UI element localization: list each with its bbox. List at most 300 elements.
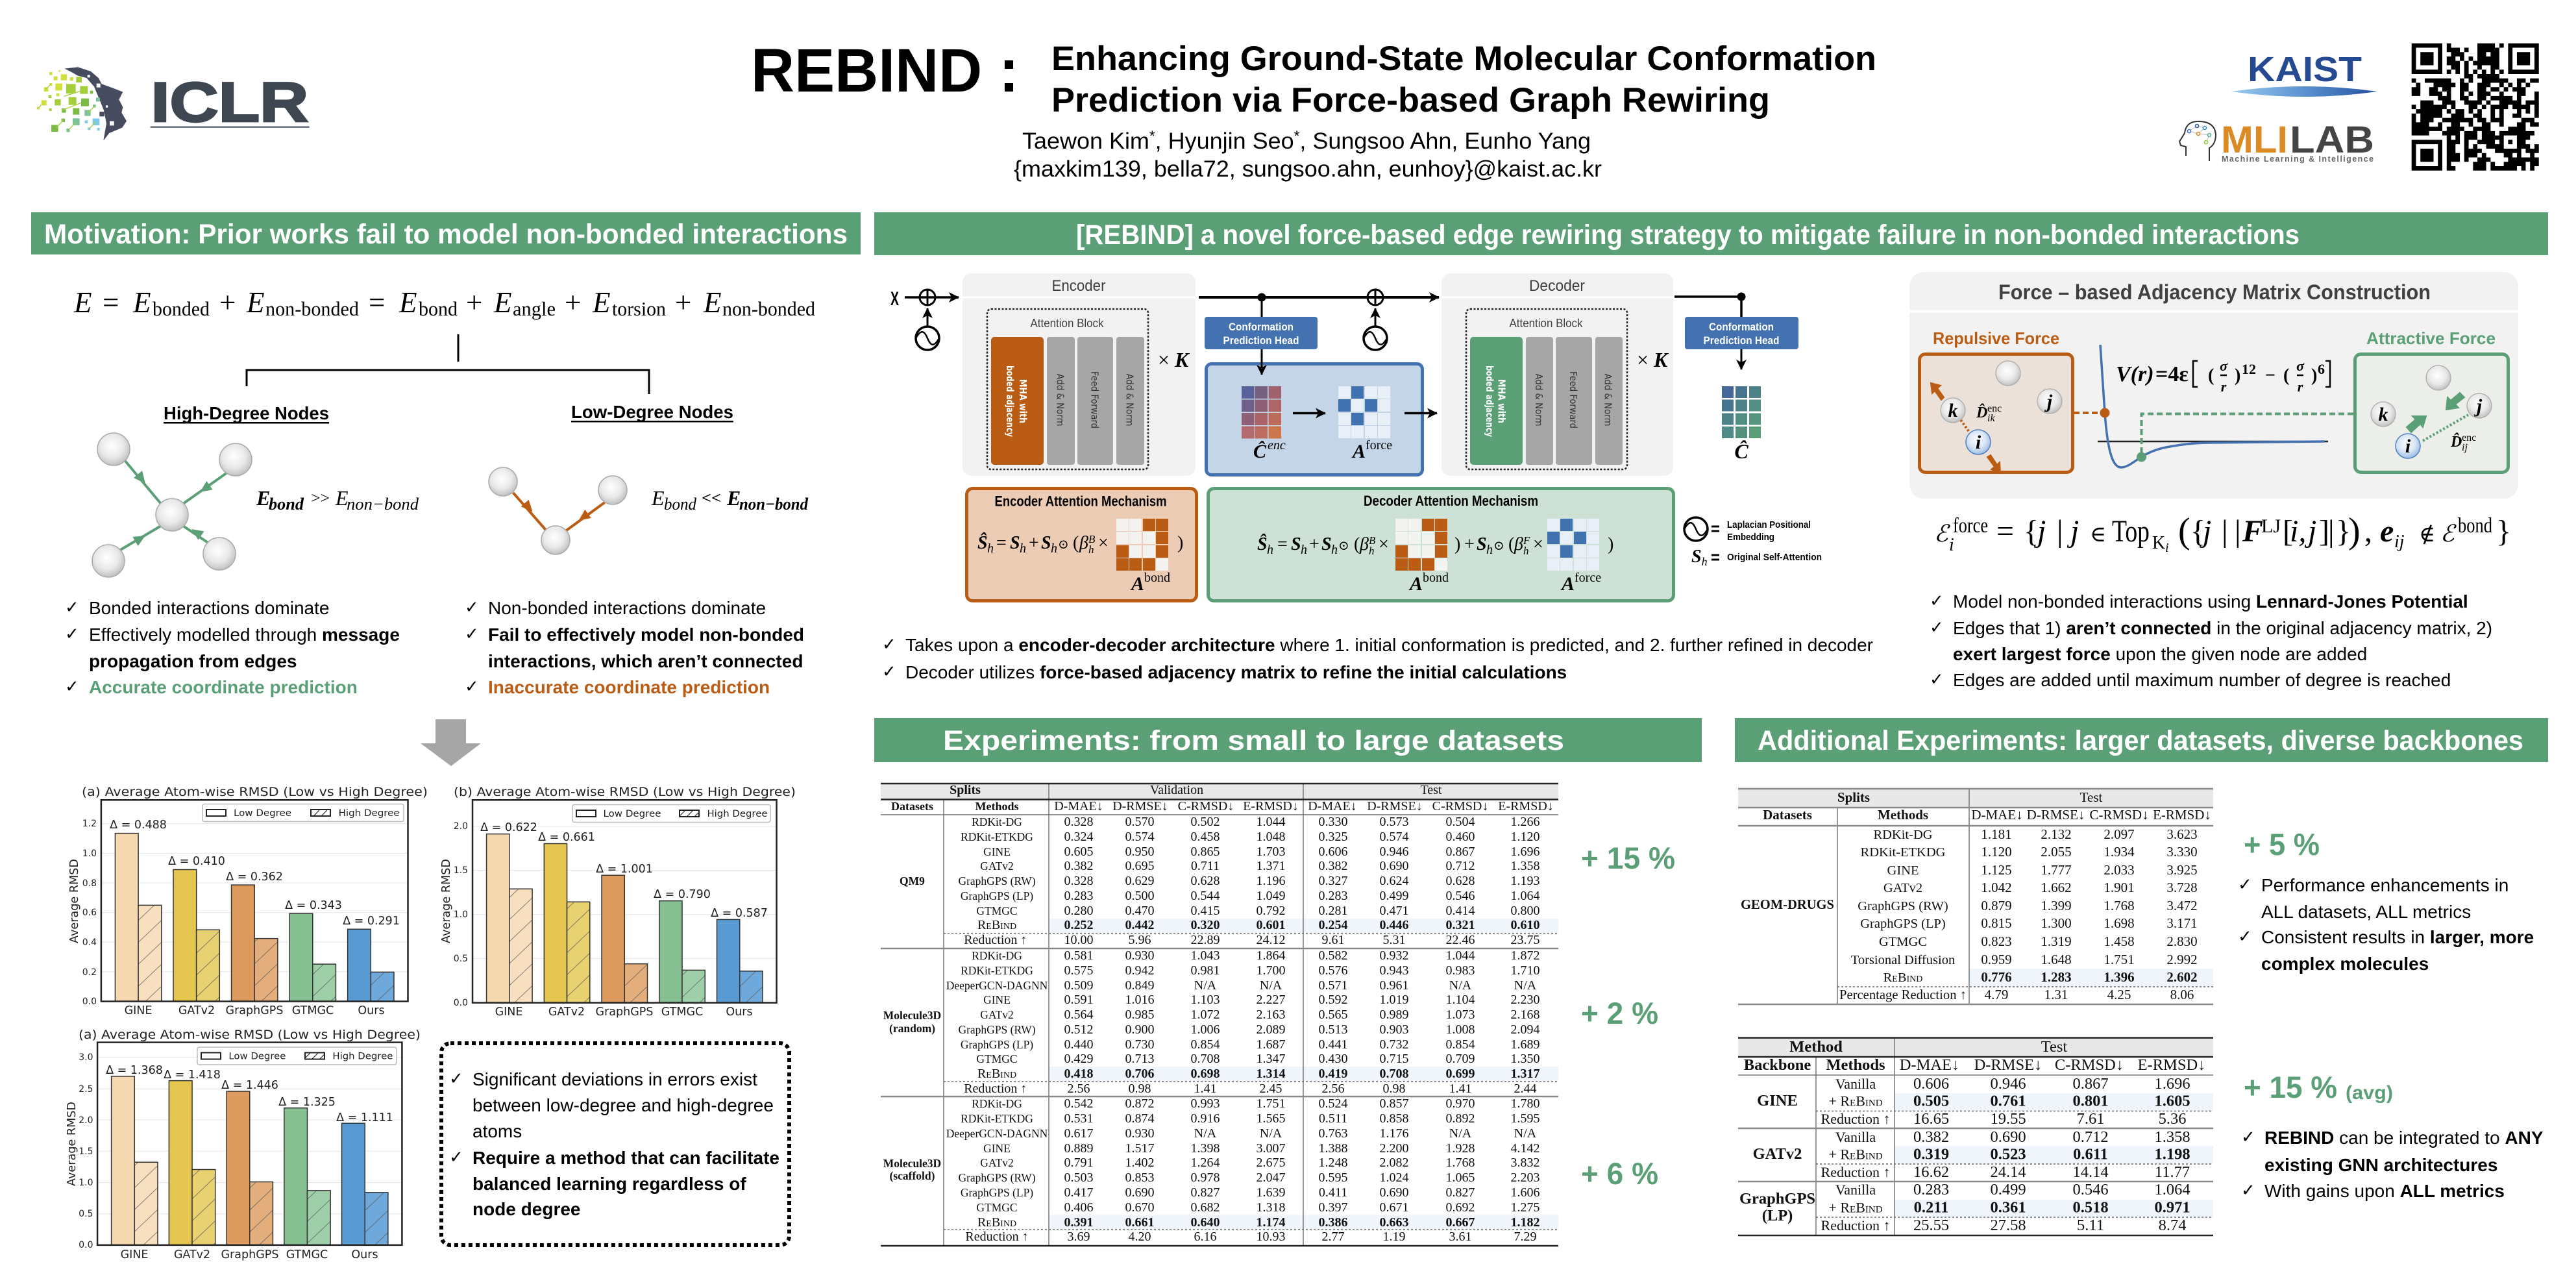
equation: decoder attention: S bbox=[1291, 534, 1301, 554]
bullets: force construction bbox=[1930, 591, 2492, 690]
numeric data Molecule3D scaffold: N/A bbox=[1514, 1126, 1537, 1141]
equation: Lennard-Jones: =4ε bbox=[2155, 362, 2189, 386]
numeric data Molecule3D random: 1.687 bbox=[1257, 1037, 1285, 1052]
numeric data QM9: 0.629 bbox=[1125, 874, 1154, 888]
numeric data QM9: 0.382 bbox=[1064, 859, 1093, 873]
equation: encoder attention: = bbox=[996, 533, 1007, 553]
table: backbones: 0.546 bbox=[2072, 1181, 2109, 1198]
numeric data QM9: 0.415 bbox=[1190, 904, 1220, 918]
numeric data Molecule3D scaffold: 2.77 bbox=[1321, 1230, 1345, 1244]
numeric data Molecule3D random: 0.713 bbox=[1125, 1052, 1154, 1066]
table: backbones: D-MAE↓ bbox=[1900, 1056, 1959, 1074]
equation: force edge set: ℰ bbox=[2440, 521, 2457, 547]
method names: GATv2 bbox=[980, 1156, 1014, 1169]
table: GEOM-DRUGS: GINE bbox=[1887, 863, 1919, 878]
equation: force edge set: ] bbox=[2319, 514, 2329, 549]
equation: encoder attention: h bbox=[1088, 543, 1094, 556]
heading: REBIND: [REBIND] a novel force-based edge rewiring strategy to mitigate failure in non-bonded interactions bbox=[1076, 219, 2300, 251]
stat: +15 percent: + 15 % bbox=[1581, 841, 1675, 875]
numeric data Molecule3D scaffold: 0.874 bbox=[1125, 1111, 1154, 1126]
panel: decoder attention mechanism: A bbox=[1408, 573, 1423, 595]
table: GEOM-DRUGS: 2.132 bbox=[2041, 826, 2072, 842]
numeric data QM9: 0.610 bbox=[1511, 918, 1539, 932]
panel: encoder bbox=[963, 273, 1196, 476]
table header: D-MAE↓ bbox=[1308, 799, 1357, 813]
method names: RDKit-DG bbox=[972, 1097, 1022, 1110]
table: backbones: GATv2 bbox=[1753, 1145, 1802, 1163]
numeric data Molecule3D random: N/A bbox=[1260, 978, 1282, 993]
equation: decoder attention: h bbox=[1301, 543, 1307, 557]
numeric data Molecule3D scaffold: 0.417 bbox=[1064, 1185, 1093, 1200]
numeric data Molecule3D random: 0.706 bbox=[1125, 1067, 1154, 1081]
table: GEOM-DRUGS: D-MAE↓ bbox=[1971, 807, 2023, 823]
numeric data QM9: 0.544 bbox=[1190, 889, 1220, 903]
numeric data QM9: 0.546 bbox=[1446, 889, 1475, 903]
logo: MLILAB: MLI bbox=[2221, 119, 2288, 161]
bullets: low-degree: Fail to effectively model non-bonded bbox=[488, 625, 804, 645]
bullets: force construction: Edges that 1) aren’t connected in the original adjacency matrix, 2) bbox=[1953, 618, 2492, 638]
equation: decoder attention: S bbox=[1477, 534, 1487, 554]
numeric data QM9: 0.328 bbox=[1064, 815, 1093, 829]
stat: +15 percent avg: (avg) bbox=[2346, 1082, 2393, 1104]
equation: encoder attention: Ŝ bbox=[977, 533, 988, 553]
numeric data QM9: 0.328 bbox=[1064, 874, 1093, 888]
numeric data Molecule3D random bbox=[1064, 948, 1539, 1096]
table: GEOM-DRUGS: 1.125 bbox=[1981, 862, 2012, 878]
numeric data QM9: 1.371 bbox=[1257, 859, 1285, 873]
equation: encoder attention: × bbox=[1098, 533, 1109, 553]
chart: RMSD c: Δ = 1.446 bbox=[221, 1079, 278, 1092]
numeric data QM9: 0.792 bbox=[1257, 904, 1285, 918]
bullets: GEOM-DRUGS: ✓ bbox=[2238, 875, 2252, 895]
table: backbones: 5.36 bbox=[2159, 1110, 2186, 1128]
legend: symbols: Original Self-Attention bbox=[1727, 552, 1822, 563]
bullets: high-degree: ✓ bbox=[65, 598, 79, 617]
method names: RDKit-ETKDG bbox=[961, 830, 1033, 843]
numeric data QM9: 0.324 bbox=[1064, 830, 1093, 844]
equation: encoder attention: h bbox=[1020, 541, 1026, 556]
table: backbones: Reduction ↑ bbox=[1821, 1164, 1890, 1180]
chart: RMSD a: Δ = 0.362 bbox=[226, 871, 283, 884]
numeric data Molecule3D scaffold: 1.639 bbox=[1257, 1185, 1285, 1200]
method names: Reduction ↑ bbox=[965, 1230, 1029, 1244]
panel: decoder: Attention Block bbox=[1510, 317, 1583, 330]
logo: KAIST: KAIST bbox=[2248, 50, 2362, 89]
numeric data Molecule3D random: 2.227 bbox=[1257, 993, 1285, 1007]
table: GEOM-DRUGS: 1.751 bbox=[2104, 952, 2135, 967]
equation: energy decomposition: non-bonded bbox=[265, 297, 359, 320]
equation: force edge set: ij bbox=[2394, 532, 2405, 552]
equation: force edge set: e bbox=[2380, 514, 2394, 549]
table: GEOM-DRUGS: 1.181 bbox=[1981, 826, 2012, 842]
numeric data Molecule3D random: 2.089 bbox=[1257, 1022, 1285, 1037]
output head and final coordinates: Ĉ bbox=[1734, 440, 1748, 463]
numeric data QM9: 0.321 bbox=[1446, 918, 1475, 932]
block: MHA decoder: boded adjacency bbox=[1484, 365, 1495, 437]
equation: Lennard-Jones: − bbox=[2265, 365, 2275, 386]
table: GEOM-DRUGS: 1.396 bbox=[2104, 969, 2135, 985]
numeric data Molecule3D scaffold: 0.670 bbox=[1125, 1200, 1154, 1215]
equation: force edge set: } bbox=[2496, 514, 2511, 549]
equation: force edge set: } bbox=[2336, 514, 2351, 549]
bullets: architecture: ✓ bbox=[882, 635, 896, 654]
equation: decoder attention: h bbox=[1486, 543, 1493, 557]
table: backbones: + ReBind bbox=[1828, 1093, 1883, 1109]
equation: force edge set: i bbox=[2165, 541, 2169, 555]
equation: decoder attention: = bbox=[1277, 534, 1288, 554]
matrix: final coordinates bbox=[1722, 386, 1761, 438]
table: backbones: Vanilla bbox=[1835, 1129, 1876, 1145]
chart: RMSD a: Δ = 0.343 bbox=[285, 899, 342, 912]
equation: force edge set: Top bbox=[2112, 514, 2150, 549]
numeric data Molecule3D random: 0.903 bbox=[1380, 1022, 1408, 1037]
repulsive force box: Repulsive Force bbox=[1933, 328, 2059, 348]
numeric data Molecule3D random: 0.565 bbox=[1319, 1008, 1347, 1022]
equation: force edge set: ) bbox=[2348, 511, 2361, 551]
numeric data Molecule3D scaffold: 7.29 bbox=[1514, 1230, 1537, 1244]
equation: decoder attention: ) bbox=[1454, 534, 1460, 554]
chart: RMSD b: GATv2 bbox=[548, 1006, 585, 1019]
numeric data Molecule3D scaffold: 1.565 bbox=[1257, 1111, 1285, 1126]
numeric data Molecule3D random: 2.168 bbox=[1511, 1008, 1539, 1022]
method names: GraphGPS (RW) bbox=[958, 1171, 1036, 1184]
chart: RMSD c: GATv2 bbox=[174, 1248, 210, 1261]
bullets: GEOM-DRUGS: ✓ bbox=[2238, 927, 2252, 947]
chart: RMSD b: Δ = 1.001 bbox=[596, 863, 653, 876]
numeric data Molecule3D scaffold: N/A bbox=[1260, 1126, 1282, 1141]
method names: ReBind bbox=[977, 1067, 1016, 1081]
numeric data QM9: 0.601 bbox=[1257, 918, 1285, 932]
table: GEOM-DRUGS: 1.399 bbox=[2041, 898, 2072, 913]
chart: RMSD a bbox=[68, 785, 428, 1017]
chart: RMSD a: Δ = 0.410 bbox=[168, 855, 225, 868]
bullets: low-degree: ✓ bbox=[465, 598, 479, 617]
numeric data QM9: 0.281 bbox=[1319, 904, 1347, 918]
bullets: low-degree: ✓ bbox=[465, 625, 479, 644]
chart: RMSD a: 0.2 bbox=[82, 967, 97, 978]
dataset labels: Molecule3D bbox=[883, 1009, 941, 1022]
table: GEOM-DRUGS: 1.648 bbox=[2041, 952, 2072, 967]
equation: decoder attention: ) bbox=[1608, 534, 1613, 554]
numeric data Molecule3D random: 1.006 bbox=[1190, 1022, 1220, 1037]
bullets: high-degree: ✓ bbox=[65, 625, 79, 644]
numeric data Molecule3D scaffold: 1.024 bbox=[1380, 1170, 1408, 1185]
method names: GraphGPS (RW) bbox=[958, 1023, 1036, 1036]
table: GEOM-DRUGS: 0.823 bbox=[1981, 934, 2012, 949]
table: backbones: + ReBind bbox=[1828, 1200, 1883, 1215]
numeric data Molecule3D scaffold: 0.386 bbox=[1319, 1215, 1347, 1230]
panel: experiments small to large bbox=[874, 718, 1702, 1246]
panel: REBIND architecture bbox=[874, 212, 2548, 690]
numeric data Molecule3D scaffold: 0.763 bbox=[1319, 1126, 1347, 1141]
numeric data Molecule3D random: 0.98 bbox=[1128, 1082, 1151, 1096]
method names: GINE bbox=[983, 845, 1011, 858]
input X with positional embedding bbox=[890, 288, 959, 350]
arrow: down to charts bbox=[421, 719, 481, 766]
numeric data Molecule3D scaffold: 0.889 bbox=[1064, 1141, 1093, 1156]
numeric data Molecule3D random: 0.581 bbox=[1064, 948, 1093, 963]
equation: Lennard-Jones: σ bbox=[2220, 358, 2228, 374]
equation: bond dominates: >> bbox=[311, 490, 330, 507]
numeric data Molecule3D scaffold: 0.661 bbox=[1125, 1215, 1154, 1230]
table: GEOM-DRUGS: 1.662 bbox=[2041, 880, 2072, 895]
numeric data Molecule3D scaffold: 1.402 bbox=[1125, 1156, 1154, 1170]
chart: Lennard-Jones potential curve bbox=[2074, 345, 2353, 467]
numeric data Molecule3D scaffold: 0.595 bbox=[1319, 1170, 1347, 1185]
panel: encoder attention mechanism bbox=[967, 488, 1197, 601]
table: backbones: Backbone bbox=[1744, 1056, 1811, 1074]
chart: RMSD c: 3.0 bbox=[79, 1052, 93, 1063]
numeric data Molecule3D scaffold: 0.617 bbox=[1064, 1126, 1093, 1141]
table header: D-MAE↓ bbox=[1054, 799, 1103, 813]
numeric data Molecule3D random: 0.943 bbox=[1380, 963, 1408, 978]
table: GEOM-DRUGS: 0.879 bbox=[1981, 898, 2012, 913]
diagram: low-degree molecule bbox=[489, 467, 627, 554]
QR code bbox=[2412, 43, 2539, 171]
bullets: force construction: Model non-bonded interactions using Lennard-Jones Potential bbox=[1953, 591, 2468, 612]
bullets: architecture: ✓ bbox=[882, 662, 896, 682]
numeric data QM9: 0.500 bbox=[1125, 889, 1154, 903]
equation: force edge set: , bbox=[2364, 514, 2372, 549]
equation: Lennard-Jones: r bbox=[2221, 378, 2227, 395]
numeric data Molecule3D random: 0.575 bbox=[1064, 963, 1093, 978]
equation: bond dominates: bond bbox=[269, 495, 304, 514]
numeric data Molecule3D scaffold: 0.542 bbox=[1064, 1096, 1093, 1111]
subtitle line 1: Enhancing Ground-State Molecular Conformation bbox=[1051, 40, 1876, 78]
numeric data Molecule3D scaffold: 2.082 bbox=[1380, 1156, 1408, 1170]
chart: RMSD c: High Degree bbox=[332, 1052, 393, 1062]
equation: encoder attention: ( bbox=[1073, 533, 1079, 553]
equation: decoder attention: h bbox=[1369, 545, 1375, 557]
table: backbones: 0.523 bbox=[1990, 1145, 2026, 1163]
numeric data Molecule3D random: 2.44 bbox=[1514, 1082, 1537, 1096]
equation: energy decomposition: E bbox=[246, 286, 265, 319]
callout: key takeaway: Significant deviations in errors exist bbox=[472, 1069, 757, 1089]
numeric data Molecule3D scaffold: 0.853 bbox=[1125, 1170, 1154, 1185]
chart: RMSD c: Δ = 1.325 bbox=[278, 1096, 336, 1109]
panel: decoder attention mechanism: bond bbox=[1423, 571, 1449, 585]
equation: encoder attention: + bbox=[1029, 533, 1039, 553]
equation: energy decomposition: + bbox=[565, 286, 581, 319]
authors: Taewon Kim bbox=[1022, 129, 1146, 154]
table: GEOM-DRUGS: 3.925 bbox=[2166, 862, 2198, 878]
table: backbones: 0.382 bbox=[1913, 1128, 1949, 1146]
equation: energy decomposition: E bbox=[399, 286, 417, 319]
method names: DeeperGCN-DAGNN bbox=[946, 1127, 1048, 1140]
callout: key takeaway: ✓ bbox=[449, 1069, 463, 1089]
numeric data QM9: 0.711 bbox=[1191, 859, 1220, 873]
numeric data QM9: 10.00 bbox=[1064, 933, 1093, 947]
numeric data QM9: 9.61 bbox=[1321, 933, 1345, 947]
panel: decoder attention mechanism: A bbox=[1560, 573, 1575, 595]
heading: low-degree nodes: Low-Degree Nodes bbox=[571, 402, 733, 422]
numeric data QM9: 0.458 bbox=[1190, 830, 1220, 844]
heading: experiments: Experiments: from small to large datasets bbox=[943, 725, 1564, 756]
block: MHA with bonded adjacency: MHA with bbox=[1017, 379, 1029, 423]
attractive force box bbox=[2355, 328, 2508, 473]
bullets: GEOM-DRUGS: ALL datasets, ALL metrics bbox=[2261, 902, 2471, 922]
emails: {maxkim139, bella72, sungsoo.ahn, eunhoy}@kaist.ac.kr bbox=[1014, 156, 1602, 182]
equation: force edge set: | bbox=[2235, 514, 2241, 549]
chart: RMSD b: Ours bbox=[726, 1006, 753, 1019]
numeric data Molecule3D random: 2.094 bbox=[1511, 1022, 1539, 1037]
chart: RMSD c: GraphGPS bbox=[221, 1248, 278, 1261]
numeric data Molecule3D random: 0.981 bbox=[1190, 963, 1220, 978]
table: backbones: 8.74 bbox=[2159, 1217, 2186, 1234]
chart: RMSD a: 0.0 bbox=[82, 997, 97, 1007]
chart: RMSD c: Δ = 1.111 bbox=[336, 1111, 393, 1124]
chart: RMSD a: (a) Average Atom-wise RMSD (Low vs High Degree) bbox=[82, 785, 428, 799]
table: backbones: 0.971 bbox=[2154, 1198, 2190, 1217]
heading: additional experiments bbox=[1735, 718, 2548, 762]
output head and final coordinates bbox=[1674, 292, 1798, 463]
table header: C-RMSD↓ bbox=[1432, 799, 1488, 813]
table: GEOM-DRUGS: Torsional Diffusion bbox=[1851, 953, 1955, 967]
equation: decoder attention: + bbox=[1309, 534, 1319, 554]
block: decoder add and norm / feed forward: Add & Norm bbox=[1602, 374, 1614, 426]
numeric data Molecule3D random: 0.989 bbox=[1380, 1008, 1408, 1022]
numeric data Molecule3D random: 1.008 bbox=[1446, 1022, 1475, 1037]
chart: RMSD b bbox=[440, 785, 796, 1019]
chart: RMSD a: 1.2 bbox=[82, 819, 97, 829]
equation: energy decomposition: = bbox=[369, 286, 385, 319]
numeric data Molecule3D scaffold: 1.517 bbox=[1125, 1141, 1154, 1156]
equation: Lennard-Jones: ) bbox=[2235, 365, 2240, 386]
bullets: low-degree: Inaccurate coordinate prediction bbox=[488, 677, 770, 697]
callout: key takeaway: atoms bbox=[472, 1121, 522, 1141]
numeric data QM9: 0.460 bbox=[1446, 830, 1475, 844]
numeric data Molecule3D scaffold: 4.20 bbox=[1128, 1230, 1151, 1244]
method names: GTMGC bbox=[976, 1052, 1018, 1065]
table: backbones: 25.55 bbox=[1913, 1217, 1949, 1234]
numeric data Molecule3D scaffold: 0.858 bbox=[1380, 1111, 1408, 1126]
numeric data Molecule3D scaffold: 1.388 bbox=[1319, 1141, 1347, 1156]
bullets: high-degree: propagation from edges bbox=[89, 651, 297, 671]
table: GEOM-DRUGS: 3.623 bbox=[2166, 826, 2198, 842]
equation: decoder attention: β bbox=[1514, 534, 1523, 554]
legend: symbols: S bbox=[1691, 547, 1702, 567]
table: backbones: 0.712 bbox=[2072, 1128, 2109, 1146]
numeric data Molecule3D random: 0.576 bbox=[1319, 963, 1347, 978]
chart: RMSD c: 1.0 bbox=[79, 1178, 93, 1188]
numeric data Molecule3D scaffold: 0.671 bbox=[1380, 1200, 1408, 1215]
chart: RMSD c: (a) Average Atom-wise RMSD (Low vs High Degree) bbox=[79, 1028, 421, 1042]
method names: DeeperGCN-DAGNN bbox=[946, 979, 1048, 992]
method names: GTMGC bbox=[976, 1201, 1018, 1214]
table: backbones: Test bbox=[2041, 1038, 2067, 1056]
equation: Lennard-Jones: ( bbox=[2283, 365, 2289, 386]
equation: decoder attention: ( bbox=[1508, 534, 1514, 554]
numeric data Molecule3D random: 0.513 bbox=[1319, 1022, 1347, 1037]
table: GEOM-DRUGS: GATv2 bbox=[1883, 881, 1922, 895]
bullets: architecture: Decoder utilizes force-based adjacency matrix to refine the initial calculations bbox=[905, 662, 1567, 682]
equation: energy decomposition: + bbox=[466, 286, 482, 319]
equation: force edge set: j bbox=[2067, 514, 2079, 549]
numeric data QM9: 1.196 bbox=[1257, 874, 1285, 888]
numeric data Molecule3D scaffold: 0.970 bbox=[1446, 1096, 1475, 1111]
numeric data Molecule3D random: 1.872 bbox=[1511, 948, 1539, 963]
numeric data Molecule3D scaffold: 0.667 bbox=[1446, 1215, 1475, 1230]
panel: force-based adjacency matrix construction bbox=[1909, 272, 2518, 499]
numeric data QM9: 0.414 bbox=[1446, 904, 1475, 918]
numeric data Molecule3D scaffold: N/A bbox=[1449, 1126, 1472, 1141]
table: GEOM-DRUGS: 3.728 bbox=[2166, 880, 2198, 895]
table: backbones: 16.65 bbox=[1913, 1110, 1949, 1128]
method names: GATv2 bbox=[980, 860, 1014, 873]
numeric data QM9: 0.320 bbox=[1190, 918, 1220, 932]
chart: RMSD b: Δ = 0.790 bbox=[654, 888, 711, 901]
chart: RMSD a: Δ = 0.488 bbox=[110, 819, 167, 832]
numeric data Molecule3D random: 0.418 bbox=[1064, 1067, 1093, 1081]
equation: force edge set: = bbox=[1996, 514, 2014, 549]
table: GEOM-DRUGS: 1.319 bbox=[2041, 934, 2072, 949]
chart: RMSD c: 2.5 bbox=[79, 1084, 93, 1095]
table header: Validation bbox=[1150, 783, 1203, 797]
logo: MLILAB: LAB bbox=[2290, 119, 2374, 161]
stat: +15 percent avg bbox=[2244, 1070, 2393, 1104]
table: GEOM-DRUGS: 3.472 bbox=[2166, 898, 2198, 913]
numeric data QM9: 23.75 bbox=[1511, 933, 1539, 947]
table header: D-RMSE↓ bbox=[1112, 799, 1168, 813]
callout: key takeaway: between low-degree and high-degree bbox=[472, 1095, 774, 1115]
table: GEOM-DRUGS: ReBind bbox=[1883, 971, 1922, 985]
dataset labels: (scaffold) bbox=[890, 1169, 935, 1182]
table: backbones: 5.11 bbox=[2077, 1217, 2104, 1234]
numeric data Molecule3D random: 1.700 bbox=[1257, 963, 1285, 978]
block: add and norm / feed forward: Add & Norm bbox=[1054, 374, 1066, 426]
numeric data QM9: 24.12 bbox=[1257, 933, 1285, 947]
numeric data QM9: 0.327 bbox=[1319, 874, 1347, 888]
chart: RMSD c: Average RMSD bbox=[66, 1102, 79, 1186]
numeric data QM9: 1.358 bbox=[1511, 859, 1539, 873]
legend: symbols: Laplacian Positional bbox=[1727, 520, 1811, 530]
diagram: high-degree molecule bbox=[92, 433, 252, 577]
equation: force edge set: [ bbox=[2283, 514, 2293, 549]
equation: force edge set: force bbox=[1953, 514, 1988, 538]
method names: GTMGC bbox=[976, 904, 1018, 917]
equation: energy decomposition: + bbox=[675, 286, 691, 319]
table: GEOM-DRUGS: 1.768 bbox=[2104, 898, 2135, 913]
numeric data Molecule3D scaffold: 0.640 bbox=[1190, 1215, 1220, 1230]
equation: decoder attention: ( bbox=[1354, 534, 1360, 554]
table: backbones: + ReBind bbox=[1828, 1146, 1883, 1162]
numeric data Molecule3D random: 0.715 bbox=[1380, 1052, 1408, 1066]
table: backbones: 14.14 bbox=[2072, 1163, 2109, 1181]
chart: RMSD b: Δ = 0.622 bbox=[480, 821, 537, 834]
equation: force edge set: j bbox=[2033, 514, 2046, 549]
chart: RMSD b: Average RMSD bbox=[440, 859, 453, 943]
method names: GraphGPS (LP) bbox=[961, 889, 1033, 902]
table: backbones: C-RMSD↓ bbox=[2055, 1056, 2124, 1074]
table: GEOM-DRUGS: E-RMSD↓ bbox=[2153, 807, 2211, 823]
numeric data Molecule3D random: 0.900 bbox=[1125, 1022, 1154, 1037]
equation: Lennard-Jones: ) bbox=[2311, 365, 2317, 386]
stat: +6 percent: + 6 % bbox=[1581, 1156, 1658, 1191]
numeric data QM9: 22.89 bbox=[1190, 933, 1220, 947]
numeric data Molecule3D random: 0.854 bbox=[1446, 1037, 1475, 1052]
numeric data Molecule3D random: 1.072 bbox=[1190, 1008, 1220, 1022]
authors: * bbox=[1294, 128, 1300, 144]
numeric data Molecule3D scaffold: 1.928 bbox=[1446, 1141, 1475, 1156]
bullets: high-degree: Accurate coordinate prediction bbox=[89, 677, 358, 697]
numeric data Molecule3D random: N/A bbox=[1449, 978, 1472, 993]
numeric data Molecule3D random: 0.932 bbox=[1380, 948, 1408, 963]
attractive force box: D̂ bbox=[2450, 433, 2462, 451]
numeric data Molecule3D scaffold: 0.682 bbox=[1190, 1200, 1220, 1215]
chart: RMSD c: 1.5 bbox=[79, 1146, 93, 1157]
attractive force box: ij bbox=[2462, 442, 2468, 453]
logo: KAIST bbox=[2231, 50, 2377, 97]
